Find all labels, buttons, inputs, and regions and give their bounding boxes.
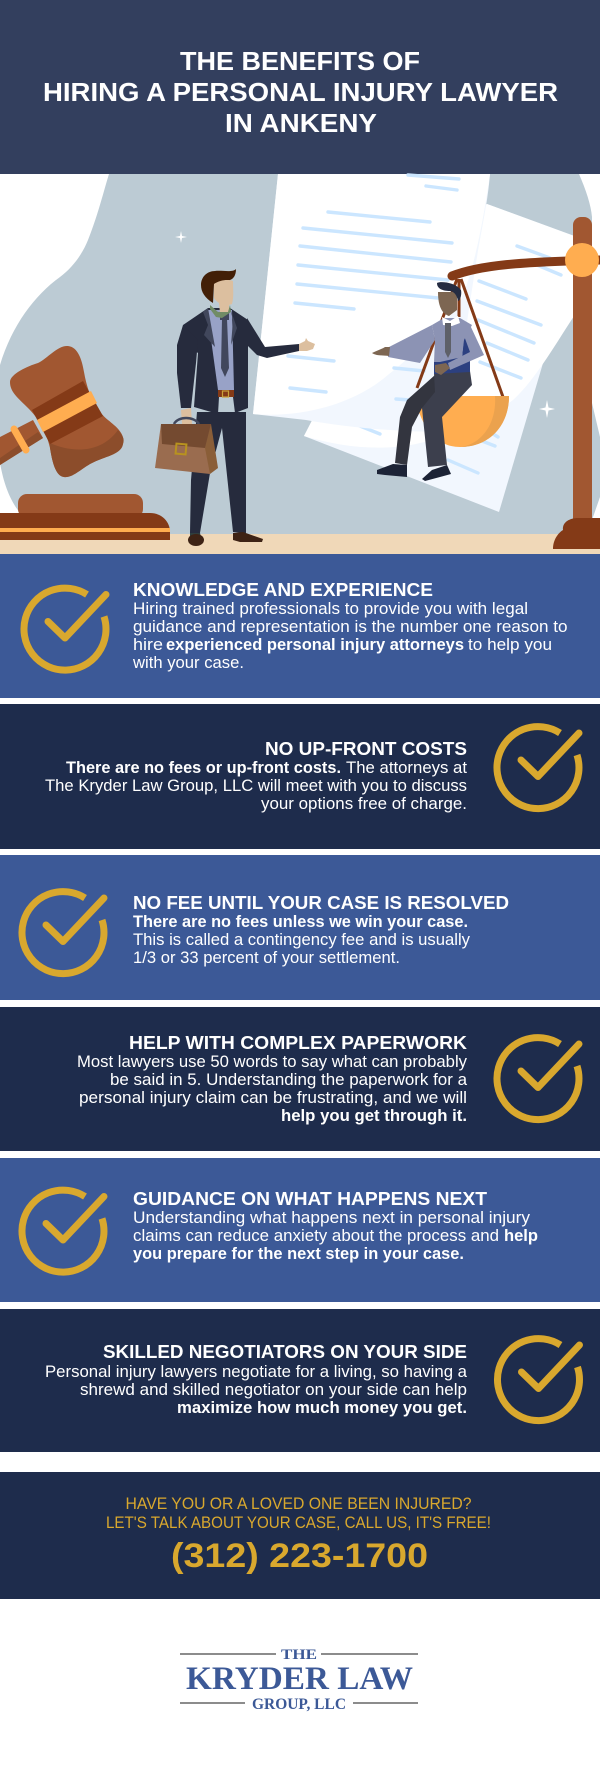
body text: The Kryder Law Group, LLC will meet with you to discuss bbox=[45, 777, 467, 795]
heading: HELP WITH COMPLEX PAPERWORK bbox=[129, 1033, 467, 1053]
panel: no fee until your case is resolved bbox=[0, 855, 600, 1000]
title: THE BENEFITS OF bbox=[180, 48, 420, 76]
body text: with your case. bbox=[132, 654, 244, 672]
body text: shrewd and skilled negotiator on your side can help bbox=[80, 1381, 467, 1399]
body text bbox=[132, 600, 568, 672]
panel: call to action bbox=[0, 1472, 600, 1599]
figure: client sitting on scale bbox=[372, 282, 484, 481]
phone number: (312) 223-1700 bbox=[171, 1537, 428, 1575]
icon: check mark bbox=[497, 1339, 580, 1421]
scale pan bbox=[415, 396, 509, 447]
logo: KRYDER LAW bbox=[186, 1661, 413, 1697]
icon: check mark bbox=[497, 1038, 579, 1120]
sound block bbox=[0, 494, 170, 540]
scale knob bbox=[565, 243, 599, 277]
body text: your options free of charge. bbox=[261, 795, 467, 813]
panel: no up-front costs bbox=[0, 704, 600, 849]
body text: There are no fees or up-front costs. bbox=[66, 759, 341, 777]
icon: check mark bbox=[24, 588, 106, 670]
body text: This is called a contingency fee and is usually bbox=[133, 931, 471, 949]
body text bbox=[45, 759, 467, 813]
logo bbox=[180, 1647, 418, 1713]
body text: Most lawyers use 50 words to say what can probably bbox=[77, 1053, 468, 1071]
body text: be said in 5. Understanding the paperwork for a bbox=[110, 1071, 468, 1089]
icon: check mark bbox=[497, 727, 579, 809]
document: front page bbox=[253, 174, 490, 432]
body text: 1/3 or 33 percent of your settlement. bbox=[133, 949, 400, 967]
call to action text bbox=[106, 1495, 491, 1532]
body text bbox=[77, 1053, 468, 1125]
logo: GROUP, LLC bbox=[252, 1696, 346, 1713]
scale chains bbox=[417, 279, 503, 397]
body text: personal injury claim can be frustrating, and we will bbox=[79, 1089, 467, 1107]
call to action text: HAVE YOU OR A LOVED ONE BEEN INJURED? bbox=[126, 1495, 472, 1513]
body text: help you get through it. bbox=[281, 1107, 467, 1125]
body text bbox=[133, 1209, 538, 1263]
panel: help with complex paperwork bbox=[0, 1007, 600, 1151]
title bbox=[43, 48, 558, 138]
body text: The attorneys at bbox=[346, 759, 467, 777]
background blob bbox=[0, 174, 600, 534]
logo: THE bbox=[281, 1647, 317, 1663]
body text: Personal injury lawyers negotiate for a living, so having a bbox=[45, 1363, 468, 1381]
body text: help bbox=[504, 1227, 538, 1245]
call to action text: LET'S TALK ABOUT YOUR CASE, CALL US, IT'S FREE! bbox=[106, 1514, 491, 1532]
title: IN ANKENY bbox=[225, 110, 377, 138]
icon: check mark bbox=[22, 892, 104, 974]
scale post bbox=[415, 217, 600, 549]
panel: title header bbox=[0, 0, 600, 174]
body text bbox=[45, 1363, 468, 1417]
body text bbox=[133, 913, 471, 967]
scale beam bbox=[452, 260, 600, 276]
body text: Hiring trained professionals to provide you with legal bbox=[133, 600, 528, 618]
panel: skilled negotiators on your side bbox=[0, 1309, 600, 1452]
body text: claims can reduce anxiety about the process and bbox=[133, 1227, 499, 1245]
body text: to help you bbox=[468, 636, 552, 654]
icon: briefcase bbox=[155, 418, 218, 474]
heading: SKILLED NEGOTIATORS ON YOUR SIDE bbox=[103, 1342, 467, 1362]
body text: guidance and representation is the number one reason to bbox=[133, 618, 568, 636]
panel: knowledge and experience bbox=[0, 554, 600, 698]
figure: standing lawyer bbox=[155, 269, 315, 546]
heading: GUIDANCE ON WHAT HAPPENS NEXT bbox=[133, 1189, 487, 1209]
ground bbox=[0, 534, 600, 554]
heading: KNOWLEDGE AND EXPERIENCE bbox=[133, 580, 433, 600]
title: HIRING A PERSONAL INJURY LAWYER bbox=[43, 79, 558, 107]
body text: There are no fees unless we win your case. bbox=[133, 913, 468, 931]
icon: sparkle right bbox=[539, 400, 555, 418]
gavel bbox=[0, 346, 170, 540]
document: back page bbox=[304, 204, 580, 512]
body text: hire bbox=[133, 636, 163, 654]
body text: you prepare for the next step in your case. bbox=[133, 1245, 464, 1263]
heading: NO UP-FRONT COSTS bbox=[265, 739, 467, 759]
body text: experienced personal injury attorneys bbox=[166, 636, 464, 654]
icon: check mark bbox=[22, 1190, 104, 1272]
body text: Understanding what happens next in personal injury bbox=[133, 1209, 531, 1227]
body text: maximize how much money you get. bbox=[177, 1399, 467, 1417]
illustration: lawyer and client with gavel and scale bbox=[0, 174, 600, 554]
icon: sparkle left bbox=[175, 231, 187, 243]
heading: NO FEE UNTIL YOUR CASE IS RESOLVED bbox=[133, 893, 509, 913]
panel: guidance on what happens next bbox=[0, 1158, 600, 1302]
